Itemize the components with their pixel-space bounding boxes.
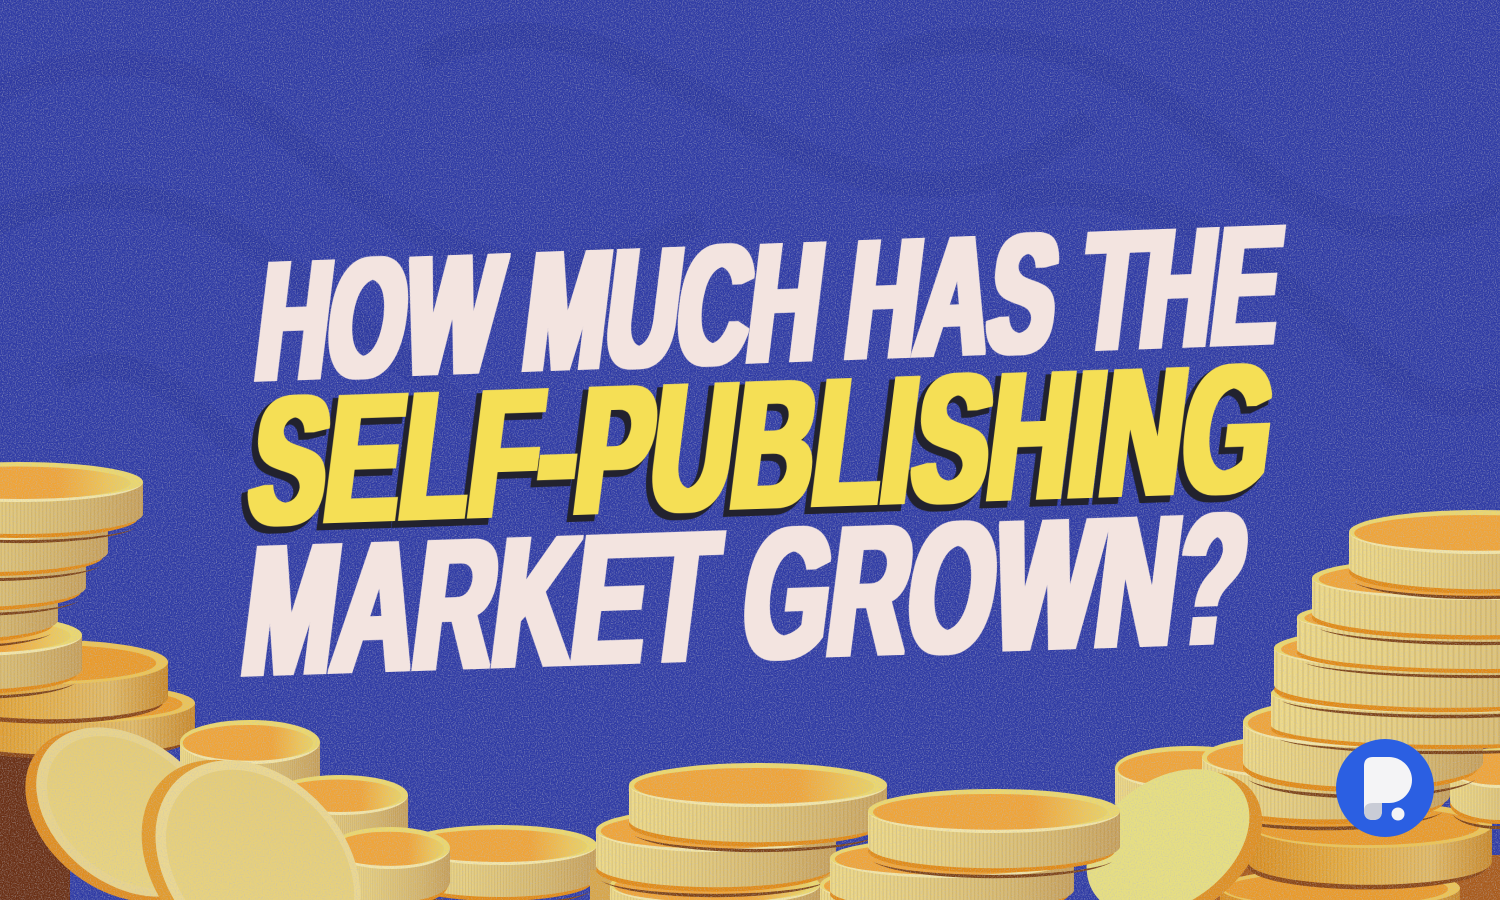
tilted coin: rear — [0, 688, 253, 900]
tilted coin: lower right — [1059, 734, 1291, 900]
coin pile: right — [1059, 510, 1500, 900]
coin pile: centre — [590, 763, 1020, 900]
logo badge — [1336, 739, 1434, 837]
centre coin stack front — [830, 789, 1120, 900]
coin pile: left — [0, 462, 597, 900]
title — [233, 190, 1292, 715]
tilted coin: front — [100, 712, 402, 900]
